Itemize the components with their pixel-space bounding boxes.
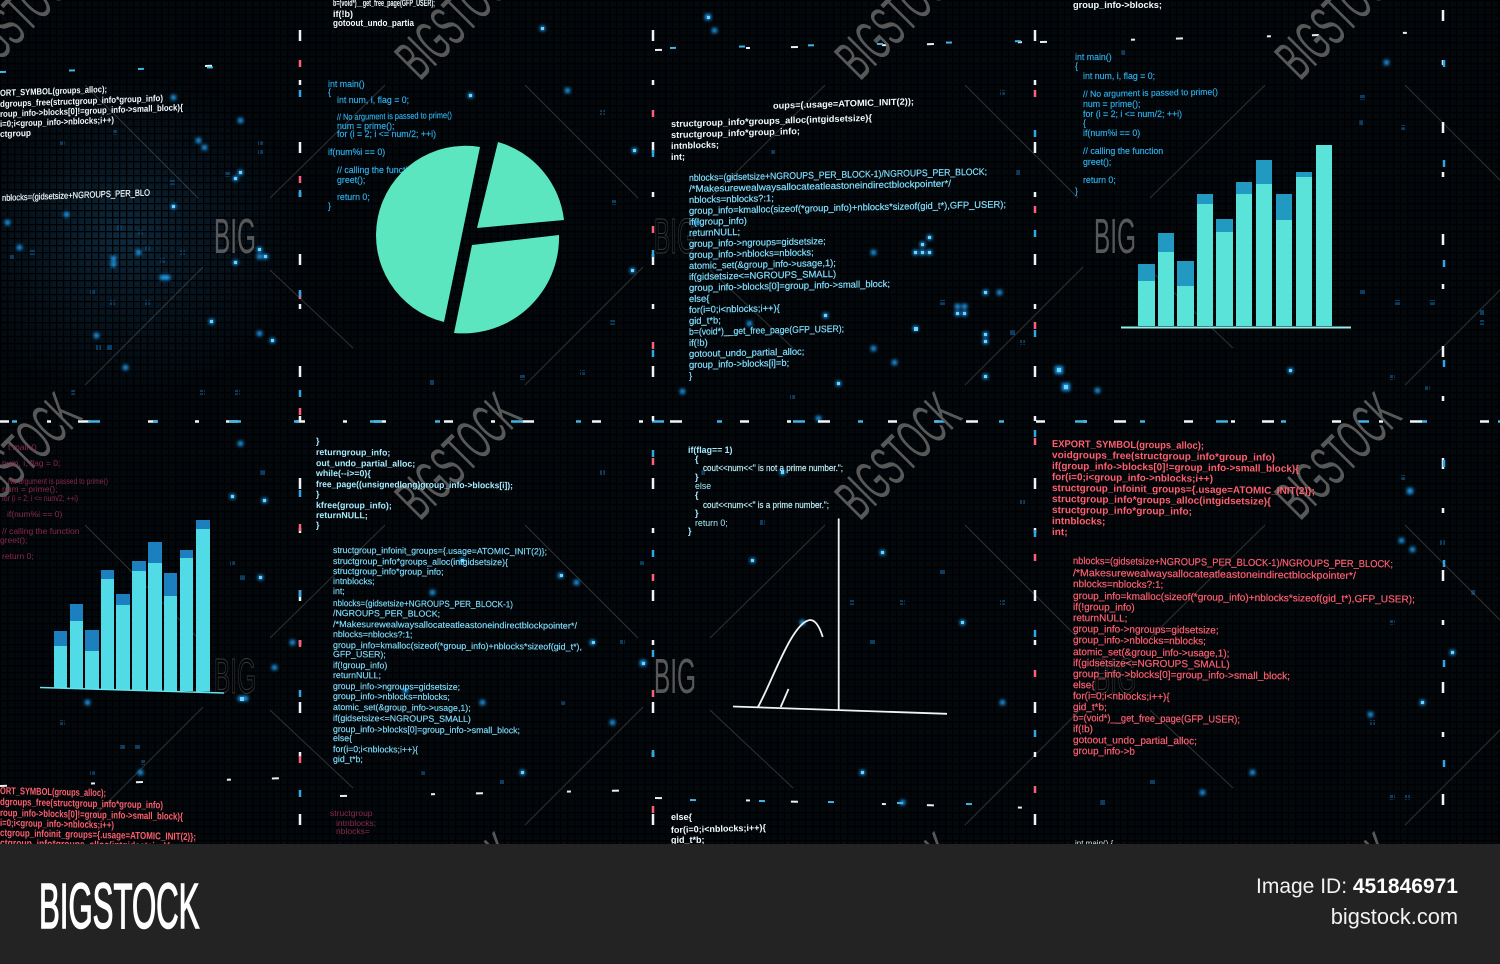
code: faded prime function, bottom left: No argument is passed to prime()	[8, 476, 108, 486]
code: bottom left red	[0, 786, 196, 853]
code: column three main block: gotoout_undo_partial_alloc;	[689, 346, 804, 359]
code: column three heading block: intnblocks;	[671, 139, 719, 151]
code: column four red main block: if(!group_info)	[1073, 602, 1135, 614]
code: prime function, column four: {	[1083, 118, 1086, 128]
code: column two main block: group_info->blocks[0]=group_info->small_block;	[333, 724, 520, 735]
code: faded prime function, bottom left: num, i, flag = 0;	[2, 458, 60, 468]
code: faded red fragment, column two bottom: nblocks=	[336, 826, 370, 836]
code: column three main block	[689, 165, 1006, 381]
code: column four red main block: nblocks=nblocks?:1;	[1073, 579, 1163, 591]
code: column three main block: group_info->blocks[i]=b;	[689, 357, 789, 370]
code: column three heading block: int;	[671, 152, 685, 162]
code: prime function, column two: return 0;	[337, 192, 370, 202]
code: column two bold block: }	[316, 436, 320, 446]
code: bottom left red: ctgroup_infoinit_groups={.usage=ATOMIC_INIT(2)};	[0, 828, 196, 843]
code: column four red main block: if(!b)	[1073, 724, 1093, 735]
code: prime function, column two: greet();	[337, 175, 365, 185]
code: column two main block: GFP_USER);	[333, 649, 386, 659]
code: column two main block	[333, 545, 582, 766]
code: prime result, column three	[688, 445, 843, 536]
code: column two bold block: out_undo_partial_alloc;	[316, 458, 415, 469]
code: column three main block: else{	[689, 293, 709, 304]
code: top of column two: if(!b)	[333, 9, 353, 19]
code: column four red main block: for(i=0;i<nblocks;i++){	[1073, 691, 1170, 703]
line chart: white curve and axes	[733, 518, 947, 714]
watermarks: BIG	[1094, 210, 1136, 264]
code: prime function, column two: num = prime();	[337, 121, 394, 131]
code: column four red bold block: structgroup_info*groups_alloc(intgidsetsize){	[1052, 494, 1271, 508]
code: column four red main block: /*Makesurewealwaysallocateatleastoneindirectblockpointer*/	[1073, 568, 1356, 582]
code: column three main block: b=(void*)__get_free_page(GFP_USER);	[689, 323, 844, 337]
code: column two main block: /NGROUPS_PER_BLOCK;	[333, 608, 440, 619]
code: column four red bold block: voidgroups_free(structgroup_info*group_info)	[1052, 450, 1275, 464]
code: prime function, column four: return 0;	[1083, 175, 1116, 185]
code: prime function, column two: for (i = 2; i <= num/2; ++i)	[337, 129, 436, 139]
watermarks: BIG	[654, 210, 696, 264]
code: column four red main block: if(gidsetsize<=NGROUPS_SMALL)	[1073, 658, 1230, 671]
code: top of column four: group_info->blocks;	[1073, 0, 1162, 10]
code: column three bottom fragment: gid_t*b;	[671, 835, 704, 845]
code: bottom left red: i=0;i<group_info->nblocks;i++)	[0, 818, 114, 831]
code: column two main block: if(!group_info)	[333, 660, 387, 670]
code: prime function, column two: if(num%i == 0)	[328, 147, 385, 157]
code: column two main block: nblocks=nblocks?:1;	[333, 629, 412, 640]
code: column three main block: group_info->blocks[0]=group_info->small_block;	[689, 278, 890, 293]
code: faded prime function, bottom left: // calling the function	[2, 526, 80, 536]
code: column two main block: intnblocks;	[333, 576, 375, 586]
code: column two bold block	[315, 436, 513, 531]
code: prime result, column three: }	[688, 526, 692, 536]
code: column two bold block: free_page((unsignedlong)group_info->blocks[i]);	[316, 479, 513, 490]
code: column four red bold block: for(i=0;i<group_info->nblocks;i++)	[1052, 472, 1213, 485]
code: column four red bold block: EXPORT_SYMBOL(groups_alloc);	[1052, 439, 1204, 452]
code: prime function, column four: // No argument is passed to prime()	[1083, 87, 1218, 99]
code: column three main block: nblocks=(gidsetsize+NGROUPS_PER_BLOCK-1)/NGROUPS_PER_BLOCK;	[689, 166, 987, 183]
code: bottom left red: dgroups_free(structgroup_info*group_info)	[0, 797, 163, 811]
code: faded red fragment, column two bottom	[330, 808, 376, 836]
code: faded prime function, bottom left: for (i = 2; i <= num/2; ++i)	[2, 493, 78, 503]
code: top left: dgroups_free(structgroup_info*group_info)	[0, 93, 163, 109]
code: column four red bold block: structgroup_infoinit_groups={.usage=ATOMIC_INIT(2)};	[1052, 483, 1315, 497]
code: bottom left red: ORT_SYMBOL(groups_alloc);	[0, 786, 106, 799]
bar chart: bottom left	[40, 520, 224, 693]
code: column two main block: structgroup_info*group_info;	[333, 566, 444, 577]
code: column four red bold block: structgroup_info*group_info;	[1052, 505, 1192, 518]
code: column four red main block: else{	[1073, 680, 1095, 691]
code: top left: nblocks=(gidsetsize+NGROUPS_PER_BLO	[2, 188, 150, 203]
code: column two main block: group_info->ngroups=gidsetsize;	[333, 681, 460, 692]
code: bottom left red: roup_info->blocks[0]!=group_info->small_block){	[0, 808, 183, 823]
code: prime function, column four	[1075, 52, 1218, 196]
code: column two main block: group_info=kmalloc(sizeof(*group_info)+nblocks*sizeof(gid_t*),	[333, 640, 582, 652]
code: column four red bold block	[1052, 439, 1315, 541]
code: column two bold block: returngroup_info;	[316, 447, 390, 458]
code: column four red main block: group_info->ngroups=gidsetsize;	[1073, 624, 1219, 637]
code: prime function, column four: if(num%i == 0)	[1083, 128, 1140, 138]
code: column four red main block: gid_t*b;	[1073, 702, 1107, 713]
code: column two bold block: kfree(group_info);	[316, 500, 392, 511]
code: prime function, column two: }	[328, 201, 331, 211]
code: top left: ORT_SYMBOL(groups_alloc);	[0, 84, 107, 98]
pie chart	[376, 142, 564, 333]
code: faded prime function, bottom left	[0, 442, 108, 561]
code: column two main block: atomic_set(&group_info->usage,1);	[333, 702, 471, 713]
watermarks: BIGSTOCK	[823, 381, 973, 531]
code: column three main block: group_info->nblocks=nblocks;	[689, 246, 814, 260]
code: column three heading block: structgroup_info*groups_alloc(intgidsetsize){	[671, 113, 872, 129]
code: column three bottom fragment: else{	[671, 812, 693, 822]
code: prime result, column three: }	[695, 508, 699, 518]
code: prime result, column three: return 0;	[695, 518, 728, 528]
code: column two main block: /*Makesurewealwaysallocateatleastoneindirectblockpointer*/	[333, 619, 578, 631]
watermarks: BIG	[214, 650, 256, 704]
footer bar	[0, 844, 1500, 964]
code: prime function, column two: // No argument is passed to prime()	[337, 110, 452, 122]
code: column three main block: group_info=kmalloc(sizeof(*group_info)+nblocks*sizeof(gid_t*),GFP_USER);	[689, 198, 1006, 216]
code: column three bottom fragment	[671, 812, 767, 845]
code: column two bold block: }	[316, 489, 320, 499]
code: column two main block: structgroup_info*groups_alloc(intgidsetsize){	[333, 556, 508, 567]
code: column three main block: if(gidsetsize<=NGROUPS_SMALL)	[689, 268, 836, 282]
code: prime function, column four: int num, i, flag = 0;	[1083, 71, 1155, 81]
code: column two main block: structgroup_infoinit_groups={.usage=ATOMIC_INIT(2)};	[333, 545, 547, 556]
code: faded prime function, bottom left: greet();	[0, 535, 27, 545]
code: faded prime function, bottom left: num = prime();	[2, 484, 58, 494]
bar chart: top right	[1121, 145, 1351, 328]
code: faded prime function, bottom left: t main()	[8, 442, 37, 452]
code: column three bottom fragment: for(i=0;i<nblocks;i++){	[671, 823, 767, 835]
code: top left	[0, 81, 183, 203]
code: prime function, column four: {	[1075, 61, 1078, 71]
code: column two main block: nblocks=(gidsetsize+NGROUPS_PER_BLOCK-1)	[333, 598, 513, 609]
code: prime function, column two: {	[328, 87, 331, 97]
code: column four red main block	[1073, 556, 1415, 761]
code: prime function, column four: num = prime();	[1083, 99, 1140, 109]
code: column four red main block: nblocks=(gidsetsize+NGROUPS_PER_BLOCK-1)/NGROUPS_PER_BLOCK;	[1073, 556, 1393, 570]
code: prime function, column two	[328, 79, 452, 211]
code: column four red main block: group_info->blocks[0]=group_info->small_block;	[1073, 669, 1290, 682]
code: prime result, column three: }	[695, 472, 699, 482]
watermarks: BIGSTOCK	[1263, 381, 1413, 531]
code: prime function, column two: int num, i, flag = 0;	[337, 95, 409, 105]
code: column four red bold block: if(group_info->blocks[0]!=group_info->small_block){	[1052, 461, 1299, 475]
code: prime function, column four: int main()	[1075, 52, 1112, 62]
code: column two main block: group_info->nblocks=nblocks;	[333, 691, 450, 702]
code: prime function, column four: for (i = 2; i <= num/2; ++i)	[1083, 109, 1182, 119]
image id: Image ID: 451846971	[1256, 875, 1458, 898]
code: column two main block: for(i=0;i<nblocks;i++){	[333, 744, 418, 755]
code: bottom left red: ctgroup_info*groups_alloc(intgidsetsize){	[0, 838, 170, 853]
code: column two main block: int;	[333, 586, 345, 596]
code: column four bottom fragment: int main() {	[1075, 839, 1114, 848]
code: top left: ctgroup	[0, 128, 31, 139]
code: column two main block: if(gidsetsize<=NGROUPS_SMALL)	[333, 713, 471, 724]
code: column four red main block: group_info->b	[1073, 746, 1135, 758]
code: prime function, column four: // calling the function	[1083, 146, 1163, 156]
watermarks: BIGSTOCK	[383, 381, 533, 531]
code: column two bold block: }	[316, 520, 320, 530]
code: column two main block: gid_t*b;	[333, 754, 363, 764]
code: prime function, column four: greet();	[1083, 157, 1111, 167]
code: column four red main block: returnNULL;	[1073, 613, 1127, 625]
code: column three main block: if(!group_info)	[689, 215, 747, 227]
code: faded red fragment, column two bottom: intnblocks;	[336, 818, 376, 828]
watermarks: BIG	[1094, 650, 1136, 704]
code: column four red main block: atomic_set(&group_info->usage,1);	[1073, 647, 1229, 660]
code: column three main block: group_info->ngroups=gidsetsize;	[689, 235, 826, 249]
code: prime function, column two: int main()	[328, 79, 365, 89]
code: column two bold block: while(--i>=0){	[315, 468, 371, 478]
code: prime result, column three: if(flag== 1)	[688, 445, 733, 455]
watermarks: BIG	[214, 210, 256, 264]
code: column four red main block: group_info=kmalloc(sizeof(*group_info)+nblocks*sizeof(gid_t*),GFP_USER);	[1073, 591, 1415, 606]
code: top of column two	[333, 0, 435, 28]
watermarks: BIG	[654, 650, 696, 704]
code: faded prime function, bottom left: return 0;	[2, 551, 34, 561]
code: top left: roup_info->blocks[0]!=group_info->small_block){	[0, 102, 183, 119]
code: prime result, column three: cout<<num<<" is a prime number.";	[703, 500, 829, 510]
code: prime result, column three: {	[695, 490, 699, 500]
code: faded red fragment, column two bottom: structgroup	[330, 808, 373, 818]
code: prime function, column four: }	[1075, 186, 1078, 196]
code: column two main block: returnNULL;	[333, 670, 381, 680]
code: column three main block: }	[689, 370, 692, 381]
code: column two main block: else{	[333, 733, 352, 743]
code: column three main block: /*Makesurewealwaysallocateatleastoneindirectblockpointer*/	[689, 178, 951, 194]
code: prime function, column two: // calling the function	[337, 165, 417, 175]
code: column four red main block: gotoout_undo_partial_alloc;	[1073, 735, 1197, 747]
code: column three heading block	[671, 96, 914, 162]
code: column three heading block: structgroup_info*group_info;	[671, 126, 800, 140]
code: column three main block: returnNULL;	[689, 226, 740, 238]
code: column three main block: nblocks=nblocks?:1;	[689, 192, 774, 205]
code: column four red main block: group_info->nblocks=nblocks;	[1073, 635, 1206, 647]
code: prime result, column three: cout<<num<<" is not a prime number.";	[703, 463, 843, 473]
code: column three main block: atomic_set(&group_info->usage,1);	[689, 257, 836, 271]
code: column two bold block: returnNULL;	[316, 510, 368, 520]
code: column three heading block: oups=(.usage=ATOMIC_INIT(2));	[773, 96, 914, 111]
code: column three main block: if(!b)	[689, 337, 708, 348]
code: top of column two: gotoout_undo_partia	[333, 18, 415, 28]
code: prime result, column three: {	[695, 454, 699, 464]
code: top left: i=0;i<group_info->nblocks;i++)	[0, 115, 114, 129]
code: prime result, column three: else	[695, 481, 711, 491]
code: column four red bold block: intnblocks;	[1052, 516, 1105, 528]
code: column four red main block: b=(void*)__get_free_page(GFP_USER);	[1073, 713, 1240, 726]
site url: bigstock.com	[1331, 904, 1458, 929]
code: column four red bold block: int;	[1052, 527, 1068, 538]
code: column three main block: for(i=0;i<nblocks;i++){	[689, 302, 780, 315]
code: faded prime function, bottom left: if(num%i == 0)	[7, 509, 62, 519]
code: column three main block: gid_t*b;	[689, 314, 721, 326]
footer logo: BIGSTOCK	[39, 870, 199, 942]
